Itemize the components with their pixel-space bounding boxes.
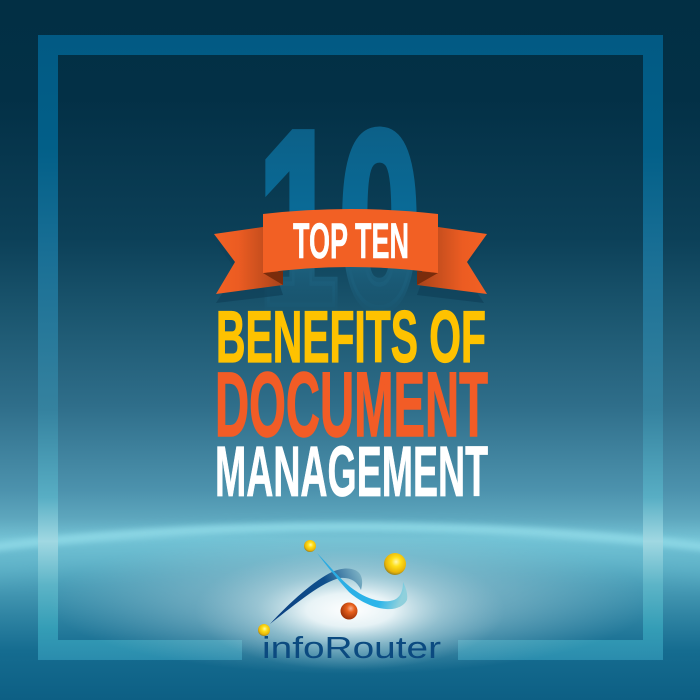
ribbon right tail: [417, 227, 487, 294]
logo dark swoosh: [270, 569, 362, 624]
ribbon left tail: [214, 227, 283, 294]
ribbon: [214, 209, 487, 303]
ribbon band: [263, 209, 438, 273]
logo wordmark: infoRouter: [262, 630, 441, 665]
big number 10: 10: [258, 80, 420, 361]
ribbon shadow: [216, 236, 484, 303]
logo yellow dot top: [304, 540, 316, 552]
centre glow: [195, 550, 505, 670]
logo light swoosh: [317, 553, 407, 609]
logo yellow dot large: [384, 553, 406, 575]
logo orange dot: [340, 602, 358, 620]
logo yellow dot bottom: [258, 624, 270, 636]
ribbon text: TOP TEN: [293, 213, 409, 269]
ribbon right fold: [417, 271, 438, 285]
ribbon left fold: [263, 271, 283, 285]
wide centre glow: [50, 530, 650, 674]
title line: benefits of: BENEFITS OF: [216, 297, 486, 378]
frame: [38, 35, 663, 660]
horizon glow: [0, 527, 700, 566]
logo: [258, 540, 441, 665]
